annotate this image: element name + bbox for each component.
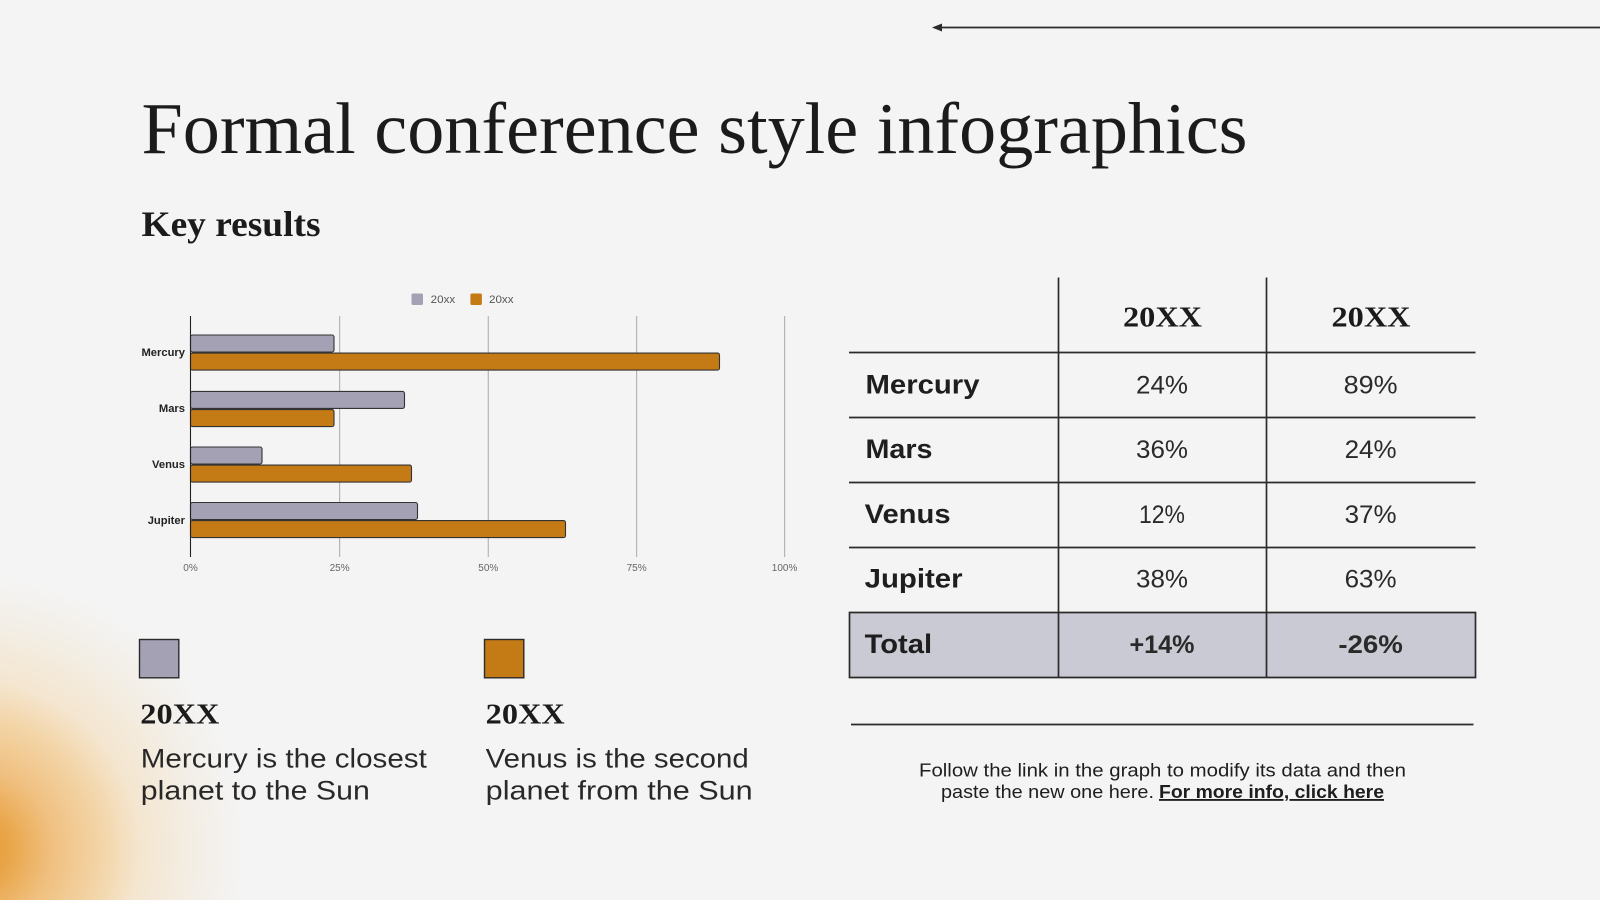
title: Formal conference style infographics (142, 88, 1248, 169)
orange swatch (484, 640, 524, 678)
table header: 20XX (1123, 302, 1202, 334)
value axis labels: 0% (183, 563, 198, 574)
row: Mars: Mars (866, 434, 932, 464)
row: Jupiter: Jupiter (865, 564, 963, 594)
series description: planet from the Sun (486, 775, 753, 805)
value axis labels: 50% (478, 563, 498, 574)
row: Jupiter (865, 564, 1397, 594)
series description: Mercury is the closest (141, 744, 427, 774)
total row background (850, 612, 1476, 678)
row: Total: +14% (1130, 631, 1194, 659)
chart legend (412, 294, 514, 306)
row: Mars: 36% (1136, 436, 1188, 464)
series description: Venus is the second (486, 744, 749, 774)
decorative orange gradient corner (0, 560, 260, 900)
series year: 20XX (140, 698, 219, 730)
legend item: first series (140, 640, 427, 805)
grey swatch (140, 640, 179, 678)
row: Mercury: 89% (1344, 371, 1398, 399)
footer note with link: paste the new one here. (941, 781, 1154, 802)
row: Jupiter: 63% (1345, 566, 1397, 594)
bars: Jupiter (190, 502, 566, 538)
arrow pointing left (932, 24, 1600, 32)
row: Total: Total (865, 629, 932, 659)
value axis labels (183, 563, 797, 574)
bars: Venus (190, 447, 412, 482)
category labels: Mars (159, 403, 185, 415)
row: Total: -26% (1338, 631, 1403, 659)
category labels: Mercury (141, 347, 186, 359)
row: Jupiter: 38% (1136, 566, 1188, 594)
table header (1123, 302, 1411, 334)
data table (849, 278, 1476, 678)
legend item: second series (484, 640, 753, 805)
row: Mars: 24% (1345, 436, 1397, 464)
row: Mercury (866, 369, 1398, 399)
chart legend: 20xx (431, 294, 456, 306)
row: Venus (865, 499, 1397, 529)
footer note with link: Follow the link in the graph to modify its data and then (919, 759, 1406, 780)
category labels (141, 347, 186, 527)
row: Venus: 12% (1139, 501, 1185, 529)
table header: 20XX (1332, 302, 1411, 334)
row: Mars (866, 434, 1397, 464)
footer note with link: For more info, click here (1159, 781, 1384, 802)
row: Total (865, 629, 1403, 659)
row: Mercury: 24% (1136, 371, 1188, 399)
footer note with link (919, 759, 1406, 802)
row: Venus: 37% (1345, 501, 1397, 529)
value axis labels: 75% (627, 563, 647, 574)
series description: planet to the Sun (141, 775, 370, 805)
value axis labels: 25% (330, 563, 350, 574)
bars: Mars (190, 391, 404, 427)
chart legend: 20xx (489, 294, 514, 306)
bar chart (141, 294, 797, 574)
bars: Mercury (190, 335, 720, 370)
heading: key results: Key results (142, 204, 320, 244)
category labels: Venus (152, 459, 185, 471)
category labels: Jupiter (148, 515, 186, 527)
series year: 20XX (486, 698, 565, 730)
value axis labels: 100% (772, 563, 797, 574)
row: Mercury: Mercury (866, 369, 980, 399)
row: Venus: Venus (865, 499, 951, 529)
